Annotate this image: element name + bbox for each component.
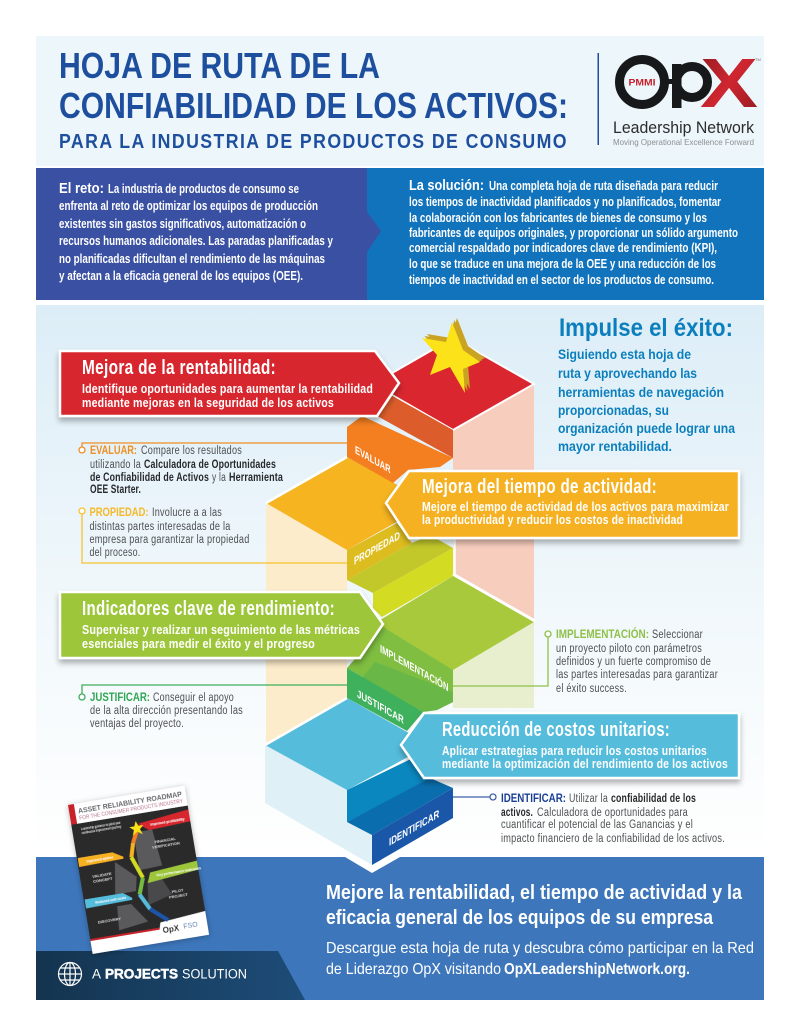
text block: identificar: Utilizar la <box>569 793 608 805</box>
white notch at base <box>345 857 400 873</box>
callout: mejora del tiempo de actividad: la productividad y reducir los costos de inactividad <box>422 512 683 527</box>
projects solution bar: A <box>92 966 101 982</box>
connector: justificar <box>79 685 347 700</box>
projects solution bar <box>36 951 305 1000</box>
text block: implementación: un proyecto piloto con parámetros <box>556 643 702 655</box>
text block: impulse el éxito: ruta y aprovechando las <box>558 365 697 381</box>
text block: propiedad: PROPIEDAD: <box>90 505 148 519</box>
logo: OpX Leadership Network <box>598 44 761 147</box>
step: uptime tread and risers <box>266 457 454 617</box>
connector: implementación <box>453 631 551 686</box>
text block: evaluar <box>90 443 283 496</box>
panel: el reto: existentes sin gastos significativos, automatización o <box>59 217 306 231</box>
panel: el reto: recursos humanos adicionales. Las paradas planificadas y <box>59 234 333 248</box>
booklet cover: Improved profitability <box>150 817 185 827</box>
booklet cover: VERIFICATION <box>152 840 180 850</box>
text block: identificar: IDENTIFICAR: <box>501 791 566 805</box>
call to action text: Descargue esta hoja de ruta y descubra cómo participar en la Red <box>326 940 754 957</box>
text block: propiedad <box>90 505 250 559</box>
text block: implementación: Seleccionar <box>652 629 703 641</box>
panel: la solución: los tiempos de inactividad planificados y no planificados, fomentar <box>409 195 721 209</box>
panel: la solución: La solución: <box>409 177 484 194</box>
step: profitability tread and risers <box>347 338 534 483</box>
booklet cover: FINANCIAL <box>154 836 177 844</box>
callout: reducción de costos unitarios: mediante la optimización del rendimiento de los activos <box>442 756 728 771</box>
panel: la solución: lo que se traduce en una mejora de la OEE y una reducción de los <box>409 257 716 271</box>
text block: propiedad: distintas partes interesadas de la <box>90 521 231 533</box>
panel: la solución: comercial respaldado por indicadores clave de rendimiento (KPI), <box>409 241 717 255</box>
title <box>59 45 568 153</box>
text block: evaluar: Herramienta <box>229 472 283 484</box>
text block: propiedad: empresa para garantizar la propiedad <box>90 534 250 546</box>
text block: implementación: el éxito success. <box>556 683 627 695</box>
booklet cover: DISCOVERY <box>97 916 122 925</box>
text block: impulse el éxito: Impulse el éxito: <box>559 314 733 342</box>
text block: identificar: activos. <box>501 807 533 819</box>
callout: mejora del tiempo de actividad: Mejore el tiempo de actividad de los activos para maximizar <box>422 499 729 514</box>
callout: mejora del tiempo de actividad <box>386 471 739 538</box>
text block: propiedad: Involucre a a las <box>152 507 222 519</box>
callout: indicadores clave de rendimiento: Supervisar y realizar un seguimiento de las métricas <box>82 622 360 637</box>
text block: impulse el éxito <box>558 314 735 454</box>
call to action heading: eficacia general de los equipos de su empresa <box>326 907 714 929</box>
logo: OpX Leadership Network: Moving Operational Excellence Forward <box>613 137 754 147</box>
callout: indicadores clave de rendimiento: Indicadores clave de rendimiento: <box>82 598 335 620</box>
step label: evaluar: EVALUAR <box>355 444 391 477</box>
booklet cover: Leadership guidance to point your <box>81 821 121 831</box>
text block: identificar: cuantificar el potencial de las Ganancias y el <box>501 819 693 831</box>
text block: identificar: Calculadora de oportunidades para <box>537 807 688 819</box>
text block: evaluar: EVALUAR: <box>90 443 137 457</box>
callout: indicadores clave de rendimiento: esenciales para medir el éxito y el progreso <box>82 636 315 651</box>
panel: el reto <box>36 168 381 300</box>
booklet cover: VALIDATE <box>92 871 112 879</box>
step label: identificar: IDENTIFICAR <box>389 808 439 849</box>
text block: evaluar: OEE Starter. <box>90 484 141 496</box>
text block: identificar: impacto financiero de la confiabilidad de los activos. <box>501 833 725 845</box>
booklet cover: continuous improvement journey <box>81 825 122 835</box>
step: KPI tread and risers <box>347 574 535 731</box>
logo: OpX Leadership Network: TM <box>755 57 761 62</box>
connector: evaluar <box>79 443 347 453</box>
text block: propiedad: del proceso. <box>90 547 140 559</box>
text block: implementación: las partes interesadas para garantizar <box>556 669 718 681</box>
callout: mejora de la rentabilidad: Identifique oportunidades para aumentar la rentabilidad <box>82 381 373 396</box>
text block: evaluar: utilizando la <box>90 459 141 471</box>
text block: identificar: confiabilidad de los <box>611 793 696 805</box>
call to action text <box>326 940 754 978</box>
text block: impulse el éxito: mayor rentabilidad. <box>558 438 672 454</box>
booklet cover: PROJECT <box>169 892 189 900</box>
logo: OpX Leadership Network: X <box>700 44 758 122</box>
callout: mejora de la rentabilidad: Mejora de la rentabilidad: <box>82 357 276 379</box>
text block: impulse el éxito: herramientas de navegación <box>558 384 724 400</box>
panel: el reto: y afectan a la eficacia general de los equipos (OEE). <box>59 269 303 283</box>
call to action text: OpXLeadershipNetwork.org. <box>504 961 690 978</box>
step label: propiedad: PROPIEDAD <box>354 529 400 568</box>
text block: implementación <box>556 626 718 695</box>
call to action text: de Liderazgo OpX visitando <box>326 961 501 978</box>
backing panels <box>265 384 534 865</box>
text block: justificar <box>90 690 243 730</box>
booklet cover: Key performance indicators <box>156 866 201 877</box>
text block: justificar: JUSTIFICAR: <box>90 690 150 704</box>
booklet cover: Improved uptime <box>86 855 114 864</box>
text block: impulse el éxito: Siguiendo esta hoja de <box>558 346 691 362</box>
panel: roadmap background <box>36 305 764 857</box>
panel: el reto: El reto: <box>59 180 104 197</box>
panel: la solución <box>367 168 764 300</box>
callout: reducción de costos unitarios <box>401 713 739 778</box>
callout: reducción de costos unitarios: Aplicar estrategias para reducir los costos unitarios <box>442 743 707 758</box>
panel: el reto: enfrenta al reto de optimizar los equipos de producción <box>59 199 318 213</box>
icon: star <box>422 318 485 393</box>
text block: evaluar: Compare los resultados <box>141 445 242 457</box>
projects solution bar: PROJECTS <box>105 966 178 982</box>
panel: la solución: tiempos de inactividad en el sector de los productos de consumo. <box>409 273 714 287</box>
panel: el reto: no planificadas dificultan el rendimiento de las máquinas <box>59 252 325 266</box>
callout: indicadores clave de rendimiento <box>60 592 383 658</box>
text block: implementación: definidos y un fuerte compromiso de <box>556 656 711 668</box>
booklet cover: CONCEPT <box>93 876 113 884</box>
booklet cover <box>68 785 212 954</box>
text block: impulse el éxito: proporcionadas, su <box>558 402 669 418</box>
step label: implementación: IMPLEMENTACIÓN <box>380 642 448 695</box>
footer panel <box>36 857 764 1000</box>
connector: propiedad <box>79 508 347 563</box>
panel: el reto: La industria de productos de consumo se <box>108 182 299 196</box>
call to action heading: Mejore la rentabilidad, el tiempo de actividad y la <box>326 882 743 904</box>
header panel <box>36 36 764 166</box>
booklet cover: FOR THE CONSUMER PRODUCTS INDUSTRY <box>79 799 184 822</box>
title: HOJA DE RUTA DE LA <box>59 45 380 86</box>
panel: la solución: la colaboración con los fabricantes de bienes de consumo y los <box>409 211 707 225</box>
text block: implementación: IMPLEMENTACIÓN: <box>556 626 649 641</box>
logo: OpX Leadership Network: Leadership Network <box>613 119 755 137</box>
callout: reducción de costos unitarios: Reducción de costos unitarios: <box>442 719 670 741</box>
logo: OpX Leadership Network: PMMI <box>628 78 656 88</box>
staircase <box>265 318 535 873</box>
callout: mejora de la rentabilidad <box>60 351 399 416</box>
booklet cover: ASSET RELIABILITY ROADMAP <box>78 791 183 815</box>
text block: justificar: ventajas del proyecto. <box>90 718 184 730</box>
text block: identificar <box>501 791 725 845</box>
booklet cover: PILOT <box>171 887 184 894</box>
connector: identificar <box>453 794 496 800</box>
call to action heading <box>326 882 743 929</box>
title: CONFIABILIDAD DE LOS ACTIVOS: <box>59 85 568 126</box>
text block: evaluar: Calculadora de Oportunidades <box>144 459 276 471</box>
booklet cover: OpX <box>162 923 180 935</box>
title: PARA LA INDUSTRIA DE PRODUCTOS DE CONSUMO <box>59 131 568 153</box>
text block: evaluar: de Confiabilidad de Activos <box>90 472 209 484</box>
callout: mejora del tiempo de actividad: Mejora del tiempo de actividad: <box>422 476 657 498</box>
text block: justificar: Conseguir el apoyo <box>153 692 234 704</box>
step label: justificar: JUSTIFICAR <box>357 688 404 727</box>
text block: evaluar: y la <box>212 472 226 484</box>
panel: la solución: Una completa hoja de ruta diseñada para reducir <box>489 179 718 193</box>
booklet cover: FSO <box>183 921 199 931</box>
icon: globe <box>58 962 82 986</box>
text block: justificar: de la alta dirección presentando las <box>90 705 243 717</box>
callout: mejora de la rentabilidad: mediante mejoras en la seguridad de los activos <box>82 395 334 410</box>
booklet cover: Reduced unit costs <box>95 896 127 905</box>
projects solution bar: SOLUTION <box>182 966 247 982</box>
step: unit cost tread and risers <box>265 698 453 865</box>
text block: impulse el éxito: organización puede lograr una <box>558 420 735 436</box>
